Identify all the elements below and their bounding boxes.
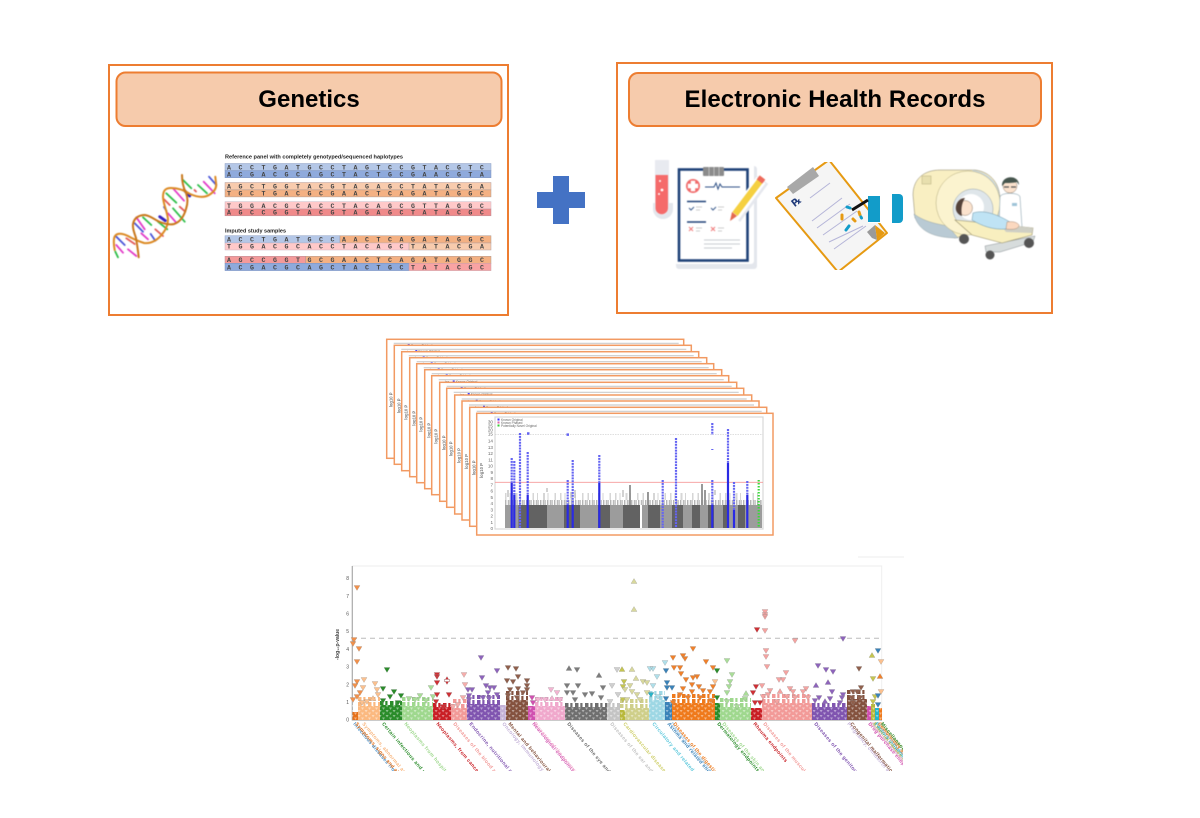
reference haplotype pair: blue: ACCTGATGCCTAGTCCGTACGTC: [227, 164, 491, 171]
back Manhattan plot cards: -log: [467, 400, 472, 404]
significance lines: [495, 481, 763, 483]
chart: PheWAS plot: [335, 556, 904, 771]
y-axis: 4: [346, 647, 349, 653]
significance threshold: [352, 637, 882, 639]
icon: DNA helix: [114, 175, 216, 257]
y-axis: 3: [346, 665, 349, 671]
health records panel frame: [617, 63, 1052, 313]
back Manhattan plot cards: -log: [482, 412, 487, 416]
rotated category labels: Special and other endpoints: [877, 721, 931, 784]
reference haplotype pair: blue: ACGACGCAGCTACTGCGAACGTA: [227, 172, 491, 178]
rotated category labels: Circulatory and related diseases: [650, 721, 712, 793]
imputed sample two: TATACGC: [411, 264, 491, 271]
arrow: plus sign: [537, 176, 585, 224]
rotated category labels: Endocrine, nutritional and metabolic: [467, 721, 536, 801]
y-axis ticks: 6: [490, 488, 493, 494]
back Manhattan plot cards: Known Original: [486, 405, 508, 409]
front Manhattan plot card: [477, 413, 773, 535]
imputed sample two: GCGAACTCAGATAGGC: [308, 257, 491, 264]
rotated category labels: Drug purchase endpoints and others: [866, 721, 935, 801]
dense category bands: [352, 699, 882, 720]
y-axis ticks: 5: [490, 495, 493, 500]
back Manhattan plot cards: Known Original: [479, 399, 501, 403]
health records heading: Electronic Health Records: [684, 86, 986, 113]
imputed sample one: AACTCAGATAGGC: [342, 237, 491, 244]
back Manhattan plot cards: log10 P: [472, 460, 477, 475]
y-axis ticks: 9: [490, 470, 493, 475]
back Manhattan plot cards: Known Original: [471, 393, 493, 397]
significant association columns: [512, 423, 759, 528]
rotated category labels: Oncology, Immunology: [500, 721, 545, 773]
y-axis ticks: [488, 420, 493, 531]
genetics heading: Genetics: [258, 86, 360, 113]
rotated category labels: Miscellaneous endpoints: [879, 721, 927, 777]
small top-right rule: [858, 556, 904, 558]
back Manhattan plot cards: log10 P: [396, 398, 401, 413]
rotated category labels: Diseases of the digestive system: [671, 721, 734, 794]
imputed sample one: TGGACGCACCTACAGC: [227, 244, 411, 251]
reference haplotype pair: red: [225, 202, 491, 217]
y-axis ticks: 1: [490, 520, 493, 525]
back Manhattan plot cards: -log: [399, 344, 404, 348]
y-axis: 2: [346, 682, 349, 688]
back Manhattan plot cards: -log: [406, 350, 412, 354]
back Manhattan plot cards: log10 P: [404, 405, 409, 420]
genetics heading: [116, 72, 502, 126]
back Manhattan plot cards: -log: [474, 406, 480, 410]
rotated category labels: Neoplasms from hospital discharges: [402, 721, 471, 801]
imputed sample two: AGCCGGT: [227, 257, 307, 264]
rotated category labels: Rheuma endpoints: [751, 721, 789, 764]
back Manhattan plot cards: -log: [422, 362, 427, 366]
back Manhattan plot cards: Known Original: [426, 356, 448, 360]
plot frame: [352, 566, 882, 720]
association triangles: [350, 578, 884, 710]
y-axis ticks: 30: [488, 420, 493, 424]
back Manhattan plot cards: -log: [452, 387, 457, 391]
rotated category labels: Symptoms, abnormal and clinical findings: [360, 721, 439, 813]
y-axis ticks: 20: [488, 428, 493, 432]
rotated category labels: Asthma and related endpoints: [665, 721, 722, 788]
legend: Known Original: [501, 418, 523, 422]
y-axis ticks: 3: [490, 507, 493, 512]
rotated category labels: Diseases of the musculoskeletal: [761, 721, 823, 793]
y-axis: 5: [346, 629, 349, 635]
icon: prescription clipboard: [776, 160, 903, 272]
rotated category labels: Comorbidity and other endpoints: [876, 721, 938, 794]
reference haplotype pair: orange: [225, 182, 491, 198]
reference haplotype pair: red: TGGACGCACCTACAGCGTTAGGC: [227, 203, 491, 210]
y-axis ticks: 10: [488, 464, 493, 468]
back Manhattan plot cards: [387, 339, 767, 526]
y-axis ticks: 11: [488, 457, 493, 462]
reference haplotype pair: red: AGCCGGTACGTAGAGCTATACGC: [227, 210, 491, 217]
back Manhattan plot cards: -log: [444, 380, 449, 384]
y-axis ticks: 12: [488, 451, 493, 456]
back Manhattan plot cards: log10 P: [427, 423, 432, 438]
back Manhattan plot cards: Known Original: [464, 387, 486, 391]
panel: electronic health records: [617, 63, 1052, 313]
reference haplotype pair: orange: TGCTGACGCGAACTCAGATAGGC: [227, 191, 491, 198]
back Manhattan plot cards: log10 P: [442, 435, 447, 450]
imputed sample one: ACCTGATGCC: [227, 237, 342, 244]
y-axis ticks: 4: [490, 501, 493, 506]
rotated category labels: Pregnancy, childbirth and puerperium: [845, 721, 916, 804]
y-axis ticks: 0: [490, 526, 493, 531]
y-axis: 0: [346, 718, 349, 724]
health records heading: [629, 73, 1041, 126]
reference haplotype pair: orange: AGCTGGTACGTAGAGCTATACGA: [227, 184, 491, 190]
y-axis title: -log₁₀p-value: [335, 629, 341, 660]
back Manhattan plot cards: Known Original: [494, 412, 516, 416]
back Manhattan plot cards: Known Original: [418, 350, 440, 354]
back Manhattan plot cards: Known Original: [411, 344, 433, 348]
reference haplotype pair: blue: [225, 164, 491, 178]
rotated category labels: Congenital malformations: [848, 721, 898, 779]
back Manhattan plot cards: Known Original: [434, 362, 456, 366]
rotated category labels: External causes of morbidity: [871, 721, 926, 785]
icon: test tube and medical chart: [653, 160, 763, 269]
back Manhattan plot cards: log10 P: [457, 448, 462, 463]
y-axis: 8: [346, 576, 349, 582]
imputed sample two: [225, 256, 491, 271]
rotated category labels: Diseases of the skin and subcutaneous: [720, 721, 794, 807]
back Manhattan plot cards: log10 P: [389, 392, 394, 407]
rotated category labels: Infectious diseases from hospital register: [351, 721, 429, 812]
back Manhattan plot cards: -log: [429, 368, 434, 372]
back Manhattan plot cards: log10 P: [434, 429, 439, 444]
panel: genetics: [109, 65, 508, 315]
rotated category labels: Neoplasms, from cancer register: [434, 721, 496, 793]
back Manhattan plot cards: -log: [459, 393, 464, 397]
legend: Known Phased: [501, 421, 523, 425]
back Manhattan plot cards: Known Original: [456, 380, 478, 384]
back Manhattan plot cards: log10 P: [412, 411, 417, 426]
reference panel caption: Reference panel with completely genotyped/sequenced haplotypes: [225, 154, 403, 160]
y-axis ticks: 14: [488, 438, 493, 444]
rotated category labels: Injury and poisoning endpoints: [870, 721, 929, 790]
back Manhattan plot cards: log10 P: [449, 441, 454, 456]
legend: [498, 418, 537, 428]
icon: MRI scanner with patient and doctor: [913, 170, 1035, 260]
y-axis ticks: 25: [488, 424, 493, 428]
rotated category labels: Mental and behavioural disorders: [506, 721, 570, 795]
rotated category labels: Diseases of the respiratory: [668, 721, 720, 782]
y-axis: 1: [346, 700, 349, 706]
back Manhattan plot cards: -log: [414, 356, 419, 360]
y-axis ticks: 7: [490, 482, 493, 487]
rotated category labels: Certain infectious and parasitic diseases: [380, 721, 456, 811]
imputed samples caption: Imputed study samples: [225, 228, 286, 234]
rotated category labels: Factors influencing health status: [873, 721, 935, 794]
imputed sample one: [225, 236, 491, 251]
rotated category labels: Diseases of the eye and adnexa: [565, 721, 625, 791]
panel: stacked Manhattan plots: [387, 339, 773, 535]
jagged tops of dense bands: [358, 692, 867, 706]
rotated category labels: Diseases of the genitourinary: [812, 721, 869, 787]
y-axis ticks: 13: [488, 445, 493, 450]
y-axis ticks: 15: [488, 432, 493, 436]
back Manhattan plot cards: log10 P: [464, 454, 469, 469]
y-axis label: log10 P: [479, 463, 484, 478]
Manhattan grey chromosome bands: [505, 484, 762, 528]
y-axis ticks: 8: [490, 476, 493, 481]
y-axis: [346, 566, 882, 724]
haplotype sequences: [225, 154, 491, 271]
y-axis: 7: [346, 594, 349, 600]
rotated category labels: Neurological endpoints: [530, 721, 576, 774]
back Manhattan plot cards: log10 P: [419, 417, 424, 432]
imputed sample one: TATACGA: [411, 244, 491, 251]
back Manhattan plot cards: Known Original: [441, 368, 463, 372]
rotated category labels: Dermatology endpoints: [715, 721, 761, 774]
rotated category labels: Cardiovascular diseases: [621, 721, 669, 776]
rotated category labels: Diseases of the nervous system: [532, 721, 592, 792]
rotated category labels: [353, 722, 903, 771]
imputed sample two: ACGACGCAGCTACTGC: [227, 264, 411, 271]
legend: Potentially Novel Original: [501, 424, 537, 428]
back Manhattan plot cards: -log: [437, 374, 442, 378]
rotated category labels: Medication and related endpoints: [874, 721, 937, 795]
y-axis: 6: [346, 612, 349, 618]
rotated category labels: Quantitative endpoints and others: [868, 721, 933, 796]
genetics panel frame: [109, 65, 508, 315]
back Manhattan plot cards: Known Original: [449, 374, 471, 378]
icon: prescription clipboard: ℞: [790, 195, 804, 209]
rotated category labels: Diseases of the ear and mastoid process: [608, 721, 684, 810]
y-axis ticks: 2: [490, 514, 493, 518]
